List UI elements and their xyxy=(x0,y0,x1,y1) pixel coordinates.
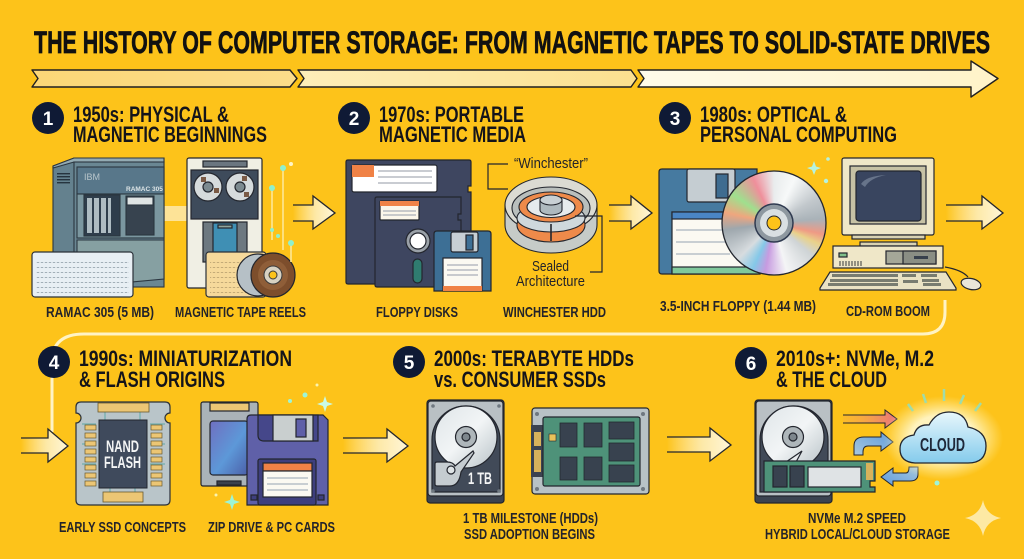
label early SSD: EARLY SSD CONCEPTS xyxy=(59,519,186,536)
step number 2 xyxy=(338,102,370,134)
label SSD adoption: SSD ADOPTION BEGINS xyxy=(464,526,595,543)
icon: CD-ROM xyxy=(722,171,826,275)
panel: 2010s xyxy=(735,346,1003,543)
label tape reels: MAGNETIC TAPE REELS xyxy=(175,304,306,321)
label zip drive: ZIP DRIVE & PC CARDS xyxy=(208,519,335,536)
panel: 2000s xyxy=(393,346,649,543)
label CD-ROM boom: CD-ROM BOOM xyxy=(846,303,930,320)
heading 2010s: & THE CLOUD xyxy=(776,367,887,392)
step number 6: 6 xyxy=(746,354,756,375)
heading 2000s xyxy=(434,346,634,392)
heading 2010s: 2010s+: NVMe, M.2 xyxy=(776,346,934,371)
sparkle star xyxy=(965,500,1001,536)
icon: punch card xyxy=(32,252,133,297)
icon: RAMAC 305 cabinet: RAMAC 305 xyxy=(126,186,163,193)
step number 5: 5 xyxy=(404,353,415,374)
heading 1970s: 1970s: PORTABLE xyxy=(379,102,524,127)
step number 3 xyxy=(659,102,691,134)
icon: cloud: CLOUD xyxy=(920,435,965,455)
icon: NAND flash chip: FLASH xyxy=(104,453,141,472)
arrow: curved blue from cloud xyxy=(881,467,918,486)
panel: 1990s xyxy=(38,346,335,536)
icon: 8-inch floppy xyxy=(346,160,471,284)
heading 1990s xyxy=(79,346,292,392)
arrow 4 xyxy=(21,429,68,462)
icon: PC card xyxy=(201,402,258,486)
callout sealed architecture: Architecture xyxy=(516,273,585,290)
icon: 3.5-inch floppy blue xyxy=(434,231,491,291)
step number 4 xyxy=(38,346,70,378)
arrow: curved blue to cloud xyxy=(854,432,893,455)
heading 2000s: vs. CONSUMER SSDs xyxy=(434,367,606,392)
label RAMAC: RAMAC 305 (5 MB) xyxy=(46,304,154,321)
step number 3: 3 xyxy=(670,109,680,130)
icon: 3.5-inch floppy xyxy=(659,169,760,274)
heading 1950s: MAGNETIC BEGINNINGS xyxy=(73,122,267,147)
green signal rays xyxy=(908,389,981,411)
icon: zip disk xyxy=(247,415,328,505)
step number 1: 1 xyxy=(43,109,54,130)
signal dot xyxy=(934,480,940,486)
icon: RAMAC 305 cabinet: IBM xyxy=(84,172,100,182)
step number 5 xyxy=(393,346,425,378)
heading 2010s xyxy=(776,346,934,392)
connector line from row one to row two xyxy=(52,300,945,432)
icon: 1 TB hard drive xyxy=(427,400,504,503)
arrow 6 xyxy=(667,428,731,461)
icon: 5.25-inch floppy xyxy=(375,197,461,287)
icon: NAND flash chip: NAND xyxy=(106,437,139,456)
arrow: upload red xyxy=(843,410,897,428)
icon: 1 TB hard drive: 1 TB xyxy=(468,469,492,488)
arrow 2 xyxy=(609,196,652,229)
icon: NAND flash chip xyxy=(76,402,170,505)
icon: magnetic tape unit xyxy=(187,158,262,288)
icon: NVMe M.2 drive xyxy=(764,461,875,492)
callout sealed architecture xyxy=(516,216,602,290)
arrow 1 xyxy=(293,196,335,229)
heading 2000s: 2000s: TERABYTE HDDs xyxy=(434,346,634,371)
arrow 5 xyxy=(343,429,408,462)
heading 1980s: PERSONAL COMPUTING xyxy=(700,122,897,147)
label 3.5-inch floppy: 3.5-INCH FLOPPY (1.44 MB) xyxy=(660,298,816,315)
icon: RAMAC 305 cabinet xyxy=(53,158,164,287)
timeline band arrow xyxy=(32,61,998,97)
light band between machines xyxy=(164,206,190,221)
icon: cloud xyxy=(883,396,1003,480)
step number 2: 2 xyxy=(349,109,359,130)
step number 6 xyxy=(735,347,767,379)
panel: 1980s xyxy=(659,102,982,320)
callout Winchester: “Winchester” xyxy=(514,155,588,172)
sparkles xyxy=(214,384,333,510)
panel: 1970s xyxy=(338,102,606,321)
icon: desktop and keyboard xyxy=(820,246,982,291)
heading 1980s: 1980s: OPTICAL & xyxy=(700,102,847,127)
label floppy disks: FLOPPY DISKS xyxy=(376,304,458,321)
heading 1970s xyxy=(379,102,526,147)
callout sealed architecture: Sealed xyxy=(532,258,569,275)
heading 1950s xyxy=(73,102,267,147)
arrow 3 xyxy=(946,196,1003,229)
heading 1970s: MAGNETIC MEDIA xyxy=(379,122,526,147)
label Winchester HDD: WINCHESTER HDD xyxy=(503,304,606,321)
heading 1990s: & FLASH ORIGINS xyxy=(79,367,225,392)
heading 1990s: 1990s: MINIATURIZATION xyxy=(79,346,292,371)
icon: SSD xyxy=(531,408,649,494)
callout Winchester xyxy=(488,155,588,189)
label hybrid storage: HYBRID LOCAL/CLOUD STORAGE xyxy=(765,526,950,543)
sparkles xyxy=(807,157,830,183)
glowing data lines xyxy=(269,162,294,262)
step number 1 xyxy=(32,102,64,134)
icon: Winchester HDD xyxy=(505,177,597,253)
heading 1950s: 1950s: PHYSICAL & xyxy=(73,102,229,127)
icon: monitor xyxy=(842,158,934,246)
icon: hard drive xyxy=(755,400,832,503)
label 1 TB milestone: 1 TB MILESTONE (HDDs) xyxy=(463,510,598,527)
step number 4: 4 xyxy=(49,353,60,374)
heading 1980s xyxy=(700,102,897,147)
panel: 1950s xyxy=(32,102,306,321)
icon: tape card and reel xyxy=(206,252,295,297)
label NVMe: NVMe M.2 SPEED xyxy=(808,510,906,527)
